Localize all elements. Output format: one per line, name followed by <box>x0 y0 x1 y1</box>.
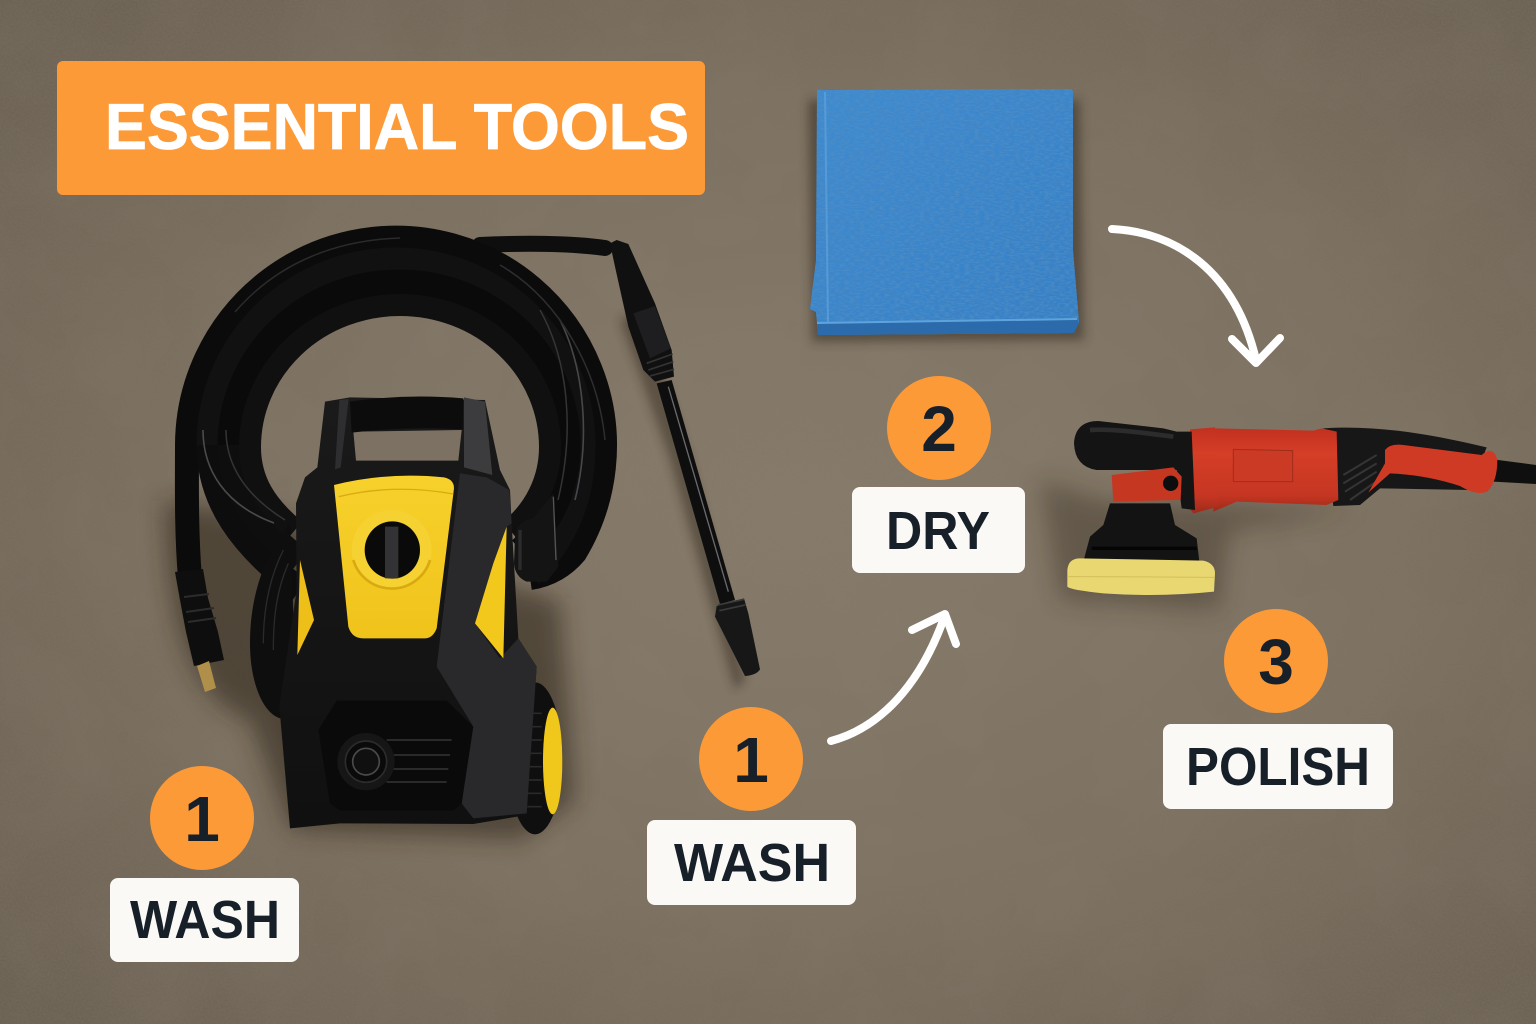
step badge: 1 wash center: 1 <box>733 724 769 796</box>
step badge: 3 polish <box>1163 609 1393 809</box>
red collar <box>1190 427 1218 513</box>
coiled hose <box>187 238 605 590</box>
black head <box>1074 421 1195 510</box>
rear grip <box>1323 428 1487 506</box>
handle opening <box>353 430 462 461</box>
pressure dial <box>352 510 432 590</box>
arrow: towel to polisher <box>1112 229 1280 363</box>
arrow: wash to dry <box>831 614 956 741</box>
title banner <box>57 61 705 195</box>
step badge: 1 wash left <box>110 766 299 962</box>
left hose lump <box>250 523 297 718</box>
lower recess <box>318 701 473 811</box>
step badge: 2 dry: 2 <box>921 393 957 465</box>
body silhouette <box>279 397 537 828</box>
step badge: 1 wash left: WASH <box>130 890 280 950</box>
handle struts <box>464 397 492 475</box>
right clip <box>514 493 558 582</box>
step badge: 2 dry: DRY <box>886 501 990 561</box>
icon: pressure washer <box>165 238 605 840</box>
side yellow panels <box>475 527 507 658</box>
step badge: 1 wash left: 1 <box>184 783 220 855</box>
power cord <box>1493 459 1536 484</box>
step badge: 3 polish: POLISH <box>1186 737 1370 797</box>
yellow front panel <box>334 476 454 638</box>
icon: spray wand <box>610 240 760 690</box>
vents <box>387 740 452 782</box>
red body <box>1213 428 1338 512</box>
step badge: 2 dry <box>852 376 1025 573</box>
icon: orbital polisher <box>1040 421 1536 610</box>
bracket <box>1112 467 1182 502</box>
icon: blue microfiber towel <box>808 89 1084 342</box>
hose connector <box>175 569 224 692</box>
step badge: 1 wash center: WASH <box>674 833 830 893</box>
handle bar <box>350 396 463 433</box>
title banner: ESSENTIAL TOOLS <box>105 90 689 163</box>
hose highlights <box>203 430 274 523</box>
outlet port <box>337 733 395 790</box>
wheel <box>508 682 562 834</box>
backing column <box>1083 503 1199 562</box>
step badge: 3 polish: 3 <box>1258 626 1294 698</box>
grey side panel <box>437 473 537 818</box>
machine, drawn in 3x local coordinates <box>250 396 562 834</box>
step badge: 1 wash center <box>647 707 856 905</box>
yellow foam pad <box>1067 558 1215 595</box>
